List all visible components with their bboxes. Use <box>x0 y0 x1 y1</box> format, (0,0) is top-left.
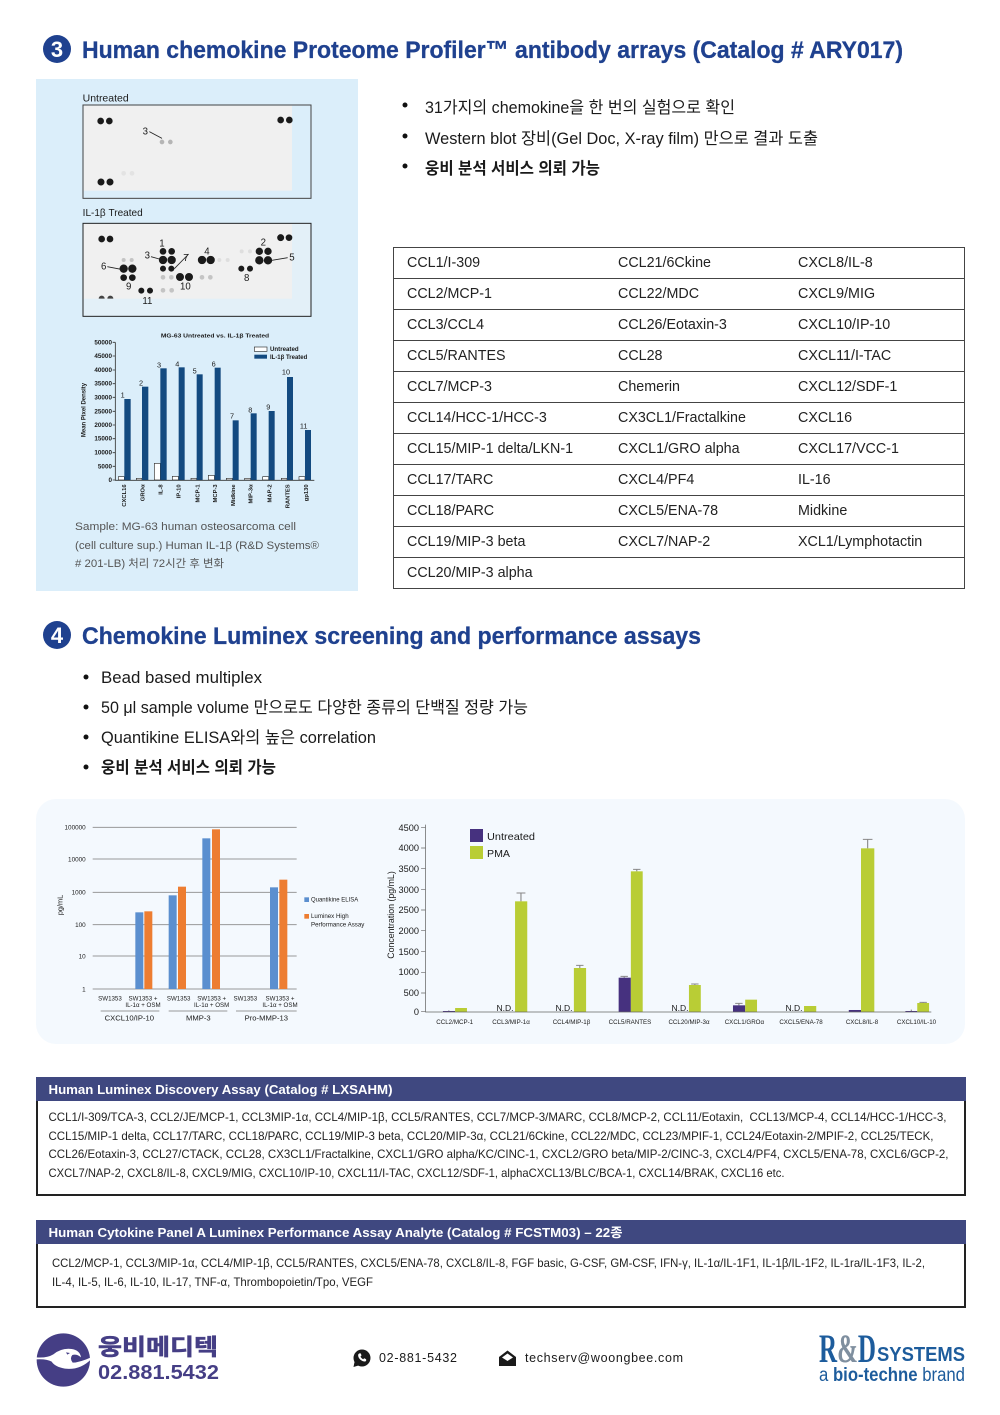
table: chemokine list: CXCL12/SDF-1 <box>798 379 897 395</box>
bar chart: Untreated vs PMA: N.D. <box>672 1003 688 1013</box>
box: Human Cytokine Panel A: IL-4, IL-5, IL-6, IL-10, IL-17, TNF-α, Thrombopoietin/Tpo, VEGF <box>52 1275 373 1289</box>
array blot: IL-1 beta treated: 1 <box>159 239 165 250</box>
bullet list: section 4: Quantikine ELISA와의 높은 correlation <box>101 728 376 747</box>
table: chemokine list: CCL1/I-309 <box>407 255 480 271</box>
bar chart: ELISA vs Luminex: Pro-MMP-13 <box>245 1013 288 1022</box>
bar chart: MG-63 untreated vs treated: IP-10 <box>177 484 183 498</box>
heading: section 4: 4 <box>51 623 64 648</box>
bar chart: MG-63 untreated vs treated: 5 <box>193 366 197 375</box>
table: chemokine list: XCL1/Lymphotactin <box>798 534 922 550</box>
bar chart: ELISA vs Luminex: Quantikine ELISA <box>311 897 358 903</box>
array blot: IL-1 beta treated: 8 <box>244 273 249 284</box>
array blot: IL-1 beta treated: 11 <box>142 296 152 307</box>
bar chart: MG-63 untreated vs treated: 50000 <box>94 339 112 346</box>
sample note: # 201-LB) 처리 72시간 후 변화 <box>75 557 224 570</box>
bar chart: MG-63 untreated vs treated: MCP-3 <box>213 484 219 502</box>
table: chemokine list: CXCL7/NAP-2 <box>618 534 710 550</box>
array blot: untreated: Untreated <box>83 93 129 104</box>
bar chart: MG-63 untreated vs treated: 45000 <box>94 353 112 360</box>
box: Human Luminex Discovery Assay: CCL26/Eotaxin-3, CCL27/CTACK, CCL28, CX3CL1/Fractalkine, CXCL1/GRO alpha/KC/CINC-1, CXCL2/GRO beta/MIP-2/CINC-3, CXCL4/PF4, CXCL5/ENA-78, CXCL6/GCP-2, <box>48 1147 948 1161</box>
bar chart: Untreated vs PMA: N.D. <box>786 1003 802 1013</box>
bar chart: Untreated vs PMA: 2500 <box>399 905 419 915</box>
bar chart: ELISA vs Luminex: SW1353 + <box>129 995 158 1002</box>
bar chart: ELISA vs Luminex: SW1353 + <box>266 995 295 1002</box>
bar chart: ELISA vs Luminex: SW1353 <box>234 995 258 1002</box>
array blot: IL-1 beta treated: 3 <box>145 251 150 262</box>
bar chart: ELISA vs Luminex: MMP-3 <box>186 1013 211 1022</box>
bar chart: ELISA vs Luminex: 100 <box>75 922 86 929</box>
bullet list: section 3: Western blot 장비(Gel Doc, X-ray film) 만으로 결과 도출 <box>425 129 818 148</box>
table: chemokine list: Chemerin <box>618 379 680 395</box>
table: chemokine list: IL-16 <box>798 472 831 488</box>
bar chart: MG-63 untreated vs treated: IL-1β Treated <box>270 355 308 361</box>
table: chemokine list: CCL21/6Ckine <box>618 255 711 271</box>
logo: R&D Systems bio-techne: SYSTEMS <box>877 1343 965 1366</box>
box: Human Cytokine Panel A: CCL2/MCP-1, CCL3/MIP-1α, CCL4/MIP-1β, CCL5/RANTES, CXCL5/ENA-78, CXCL8/IL-8, FGF basic, G-CSF, GM-CSF, IFN-γ, IL-1α/IL-1F1, IL-1β/IL-1F2, IL-1ra/IL-1F3, IL-2, <box>52 1256 925 1270</box>
array blot: IL-1 beta treated: IL-1β Treated <box>83 208 143 219</box>
table: chemokine list: CXCL9/MIG <box>798 286 875 302</box>
bar chart: MG-63 untreated vs treated: MAP-2 <box>267 484 273 502</box>
bar chart: Untreated vs PMA: CCL20/MIP-3α <box>668 1019 710 1026</box>
bar chart: MG-63 untreated vs treated: 25000 <box>94 408 112 415</box>
bar chart: Untreated vs PMA: CCL3/MIP-1α <box>492 1019 530 1026</box>
heading: section 3: 3 <box>51 37 63 62</box>
bar chart: ELISA vs Luminex: pg/mL <box>55 895 64 915</box>
box: Human Luminex Discovery Assay: CXCL7/NAP-2, CXCL8/IL-8, CXCL9/MIG, CXCL10/IP-10, CXCL11/I-TAC, CXCL12/SDF-1, alphaCXCL13/BLC/BCA-1, CXCL14/BRAK, CXCL16 etc. <box>48 1166 784 1180</box>
bar chart: Untreated vs PMA: PMA <box>487 848 510 860</box>
box: Human Cytokine Panel A: Human Cytokine Panel A Luminex Performance Assay Analyte (Catalog # FCSTM03) – 22종 <box>48 1225 623 1240</box>
bar chart: Untreated vs PMA: CXCL10/IL-10 <box>897 1019 937 1026</box>
bar chart: MG-63 untreated vs treated: 5000 <box>98 463 112 470</box>
bar chart: MG-63 untreated vs treated: 35000 <box>94 381 112 388</box>
bar chart: MG-63 untreated vs treated: 1 <box>121 391 125 400</box>
table: chemokine list: CCL22/MDC <box>618 286 699 302</box>
panel: array results <box>36 79 358 591</box>
bar chart: MG-63 untreated vs treated: MCP-1 <box>195 484 201 502</box>
bar chart: ELISA vs Luminex: IL-1α + OSM <box>194 1002 229 1009</box>
array blot: IL-1 beta treated: 2 <box>261 237 266 248</box>
table: chemokine list: CXCL16 <box>798 410 852 426</box>
bar chart: MG-63 untreated vs treated: 10 <box>282 368 290 377</box>
bar chart: ELISA vs Luminex: 1 <box>82 986 86 993</box>
bar chart: ELISA vs Luminex: SW1353 <box>167 995 191 1002</box>
table: chemokine list: CXCL5/ENA-78 <box>618 503 718 519</box>
icon: open envelope <box>499 1350 516 1366</box>
bar chart: ELISA vs Luminex: IL-1α + OSM <box>262 1002 298 1009</box>
bar chart: Untreated vs PMA: CXCL8/IL-8 <box>846 1019 879 1026</box>
bar chart: Untreated vs PMA: CXCL1/GROα <box>725 1019 764 1026</box>
bar chart: ELISA vs Luminex: SW1353 <box>98 995 122 1002</box>
bar chart: MG-63 untreated vs treated: 10000 <box>94 450 112 457</box>
icon: eagle emblem <box>36 1333 91 1387</box>
bar chart: Untreated vs PMA: 2000 <box>399 926 419 936</box>
bar chart: Untreated vs PMA: CXCL5/ENA-78 <box>779 1019 823 1026</box>
bar chart: Untreated vs PMA: 0 <box>414 1007 419 1017</box>
sample note: Sample: MG-63 human osteosarcoma cell <box>75 521 296 533</box>
table: chemokine list: CCL17/TARC <box>407 472 493 488</box>
bar chart: MG-63 untreated vs treated: 3 <box>157 360 161 369</box>
bar chart: MG-63 untreated vs treated: 7 <box>230 411 234 420</box>
bar chart: Untreated vs PMA: 1500 <box>399 947 419 957</box>
logo: R&D Systems bio-techne: a bio-techne brand <box>819 1365 965 1386</box>
table: chemokine list: CCL7/MCP-3 <box>407 379 492 395</box>
array blot: IL-1 beta treated: 7 <box>183 253 189 264</box>
table: chemokine list: CXCL8/IL-8 <box>798 255 873 271</box>
table: chemokine list: CCL28 <box>618 348 663 364</box>
table: chemokine list: CCL3/CCL4 <box>407 317 484 333</box>
bar chart: MG-63 untreated vs treated: 15000 <box>94 436 112 443</box>
bar chart: MG-63 untreated vs treated: Mean Pixel Density <box>82 382 88 437</box>
table: chemokine list: CCL19/MIP-3 beta <box>407 534 525 550</box>
table: chemokine list: CCL18/PARC <box>407 503 494 519</box>
bar chart: ELISA vs Luminex: CXCL10/IP-10 <box>105 1013 154 1022</box>
bar chart: ELISA vs Luminex: 100000 <box>65 825 86 832</box>
table: chemokine list: CCL2/MCP-1 <box>407 286 492 302</box>
bullet list: section 4 <box>84 669 528 777</box>
bar chart: ELISA vs Luminex: Luminex High <box>311 913 349 920</box>
bar chart: MG-63 untreated vs treated: gp130 <box>304 484 310 501</box>
bar chart: ELISA vs Luminex: 10000 <box>68 856 86 863</box>
bar chart: MG-63 untreated vs treated: 8 <box>248 405 252 414</box>
bar chart: MG-63 untreated vs treated: 11 <box>300 422 307 431</box>
bar chart: Untreated vs PMA: Concentration (pg/mL) <box>386 871 396 959</box>
contact: email: techserv@woongbee.com <box>525 1351 683 1365</box>
bullet list: section 4: 웅비 분석 서비스 의뢰 가능 <box>101 758 276 777</box>
bar chart: Untreated vs PMA: N.D. <box>496 1003 514 1013</box>
bar chart: MG-63 untreated vs treated: GROα <box>140 484 146 501</box>
bar chart: MG-63 untreated vs treated: MIP-3α <box>249 484 255 503</box>
table: chemokine list: CCL15/MIP-1 delta/LKN-1 <box>407 441 573 457</box>
logo: Woongbee Meditech: 웅비메디텍 <box>98 1335 218 1360</box>
table: chemokine list <box>393 248 965 588</box>
table: chemokine list: CXCL1/GRO alpha <box>618 441 740 457</box>
table: chemokine list: CCL26/Eotaxin-3 <box>618 317 727 333</box>
bar chart: Untreated vs PMA: Untreated <box>487 831 535 843</box>
array blot: IL-1 beta treated <box>83 208 311 316</box>
bullet list: section 3: 웅비 분석 서비스 의뢰 가능 <box>425 159 600 178</box>
bar chart: Untreated vs PMA: CCL5/RANTES <box>609 1019 651 1026</box>
table: chemokine list: CX3CL1/Fractalkine <box>618 410 746 426</box>
bar chart: Untreated vs PMA: 4000 <box>399 843 419 853</box>
bar chart: ELISA vs Luminex: SW1353 + <box>197 995 227 1002</box>
bar chart: MG-63 untreated vs treated: 6 <box>212 360 216 369</box>
array blot: IL-1 beta treated: 6 <box>101 261 106 272</box>
bar chart: Untreated vs PMA: CCL2/MCP-1 <box>436 1019 474 1026</box>
array blot: IL-1 beta treated: 4 <box>204 247 210 258</box>
table: chemokine list: CCL14/HCC-1/HCC-3 <box>407 410 547 426</box>
box: Human Luminex Discovery Assay <box>36 1077 966 1195</box>
table: chemokine list: CXCL11/I-TAC <box>798 348 891 364</box>
bar chart: MG-63 untreated vs treated: 30000 <box>94 394 112 401</box>
bar chart: MG-63 untreated vs treated: Untreated <box>270 347 299 353</box>
bar chart: MG-63 untreated vs treated: IL-8 <box>159 484 165 495</box>
logo: R&D Systems bio-techne <box>819 1326 965 1386</box>
table: chemokine list: CCL5/RANTES <box>407 348 506 364</box>
bullet list: section 3 <box>402 98 818 178</box>
bar chart: MG-63 untreated vs treated: RANTES <box>286 484 292 508</box>
bar chart: MG-63 untreated vs treated <box>82 334 314 508</box>
bar chart: ELISA vs Luminex: IL-1α + OSM <box>125 1002 161 1009</box>
bar chart: MG-63 untreated vs treated: 20000 <box>94 422 112 429</box>
array blot: IL-1 beta treated: 5 <box>289 253 295 264</box>
bar chart: Untreated vs PMA: CCL4/MIP-1β <box>553 1019 591 1026</box>
logo: Woongbee Meditech: 02.881.5432 <box>98 1362 219 1384</box>
bar chart: ELISA vs Luminex <box>55 825 365 1022</box>
bullet list: section 3: 31가지의 chemokine을 한 번의 실험으로 확인 <box>425 98 735 117</box>
bar chart: Untreated vs PMA: 1000 <box>399 967 419 977</box>
icon: phone <box>354 1350 370 1367</box>
box: Human Luminex Discovery Assay: CCL1/I-309/TCA-3, CCL2/JE/MCP-1, CCL3MIP-1α, CCL4/MIP-1β, CCL5/RANTES, CCL7/MCP-3/MARC, CCL8/MCP-2, CCL11/Eotaxin, CCL13/MCP-4, CCL14/HCC-1/HCC-3, <box>48 1110 946 1124</box>
bar chart: ELISA vs Luminex: 10 <box>79 953 86 960</box>
array blot: untreated <box>83 93 311 198</box>
array blot: untreated: 3 <box>143 126 148 137</box>
bar chart: ELISA vs Luminex: 1000 <box>72 890 86 897</box>
bar chart: Untreated vs PMA: 3500 <box>399 864 419 874</box>
bar chart: ELISA vs Luminex: Performance Assay <box>311 921 365 928</box>
bar chart: MG-63 untreated vs treated: 0 <box>108 477 112 484</box>
table: chemokine list: CXCL4/PF4 <box>618 472 694 488</box>
table: chemokine list: CXCL10/IP-10 <box>798 317 890 333</box>
bar chart: Untreated vs PMA: 500 <box>404 988 419 998</box>
bar chart: MG-63 untreated vs treated: 2 <box>139 379 143 388</box>
bar chart: Untreated vs PMA: 3000 <box>399 885 419 895</box>
heading: section 4: Chemokine Luminex screening and performance assays <box>82 623 701 650</box>
bar chart: Untreated vs PMA: 4500 <box>399 823 419 833</box>
heading: section 3: Human chemokine Proteome Profiler™ antibody arrays (Catalog # ARY017) <box>82 37 903 64</box>
bar chart: MG-63 untreated vs treated: 40000 <box>94 367 112 374</box>
table: chemokine list: CXCL17/VCC-1 <box>798 441 899 457</box>
box: Human Luminex Discovery Assay: Human Luminex Discovery Assay (Catalog # LXSAHM) <box>48 1082 392 1097</box>
array blot: IL-1 beta treated: 9 <box>126 282 131 293</box>
bar chart: MG-63 untreated vs treated: 9 <box>266 402 270 411</box>
sample note <box>75 521 319 570</box>
panel: Luminex charts <box>36 799 965 1044</box>
array blot: IL-1 beta treated: 10 <box>180 282 191 293</box>
bar chart: MG-63 untreated vs treated: CXCL16 <box>122 484 128 507</box>
box: Human Luminex Discovery Assay: CCL15/MIP-1 delta, CCL17/TARC, CCL18/PARC, CCL19/MIP-3 beta, CCL20/MIP-3α, CCL21/6Ckine, CCL22/MDC, CCL23/MPIF-1, CCL24/Eotaxin-2/MPIF-2, CCL25/TECK, <box>48 1129 934 1143</box>
table: chemokine list: Midkine <box>798 503 847 519</box>
bullet list: section 4: Bead based multiplex <box>101 669 263 687</box>
logo: R&D Systems bio-techne: R&D <box>819 1326 876 1371</box>
box: Human Cytokine Panel A <box>36 1220 966 1307</box>
bar chart: Untreated vs PMA <box>386 823 937 1026</box>
bullet list: section 4: 50 μl sample volume 만으로도 다양한 종류의 단백질 정량 가능 <box>101 698 528 717</box>
bar chart: MG-63 untreated vs treated: Midkine <box>231 484 237 506</box>
table: chemokine list: CCL20/MIP-3 alpha <box>407 565 533 581</box>
logo: Woongbee Meditech <box>36 1333 219 1387</box>
bar chart: MG-63 untreated vs treated: 4 <box>175 359 179 368</box>
bar chart: MG-63 untreated vs treated: MG-63 Untreated vs. IL-1β Treated <box>161 334 270 340</box>
bar chart: Untreated vs PMA: N.D. <box>556 1003 572 1013</box>
sample note: (cell culture sup.) Human IL-1β (R&D Systems® <box>75 540 319 552</box>
contact: phone: 02-881-5432 <box>379 1351 457 1365</box>
contact: phone <box>354 1350 457 1367</box>
